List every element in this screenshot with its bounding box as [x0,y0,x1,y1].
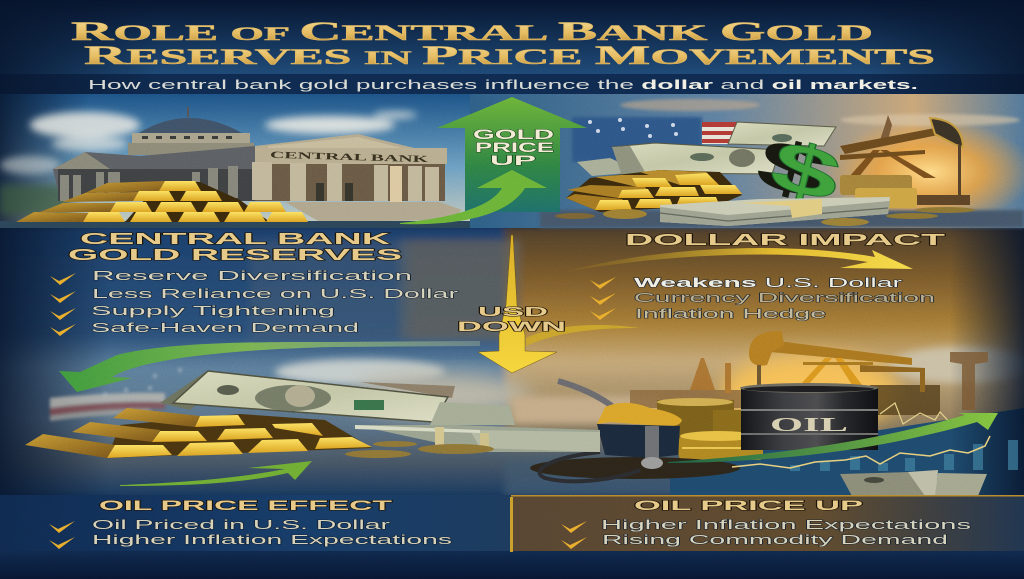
label: USD down [457,304,566,334]
list [49,518,452,549]
label: gold price up: UP [490,152,536,168]
title: R OLE OF C ENTRAL B ANK G OLD [71,17,873,46]
flag [572,117,742,162]
oil barrel [740,383,878,450]
list: Higher Inflation Expectations [92,533,452,547]
dollar sign icon: $ [749,123,834,215]
building: central bank: CENTRAL BANK [270,151,429,165]
oil barrel: OIL [770,414,848,436]
list: Weakens U.S. Dollar [634,276,902,290]
bills: lower right [840,470,987,496]
chart: rising prices [732,403,1018,471]
heading: CENTRAL BANK [80,231,392,248]
cash stack: top [660,197,890,226]
label: USD down: DOWN [457,318,566,334]
bills: lower left [160,371,600,452]
arrow: USD down [457,235,640,373]
gold bars: left [16,181,308,222]
heading: OIL PRICE EFFECT [99,498,394,513]
ground [0,221,480,228]
list: Inflation Hedge [635,307,826,321]
fuel nozzle [530,381,740,481]
list: Safe-Haven Demand [91,321,359,335]
arrow: dollar impact curve [565,248,913,272]
heading: OIL PRICE UP [634,498,863,513]
subtitle: How central bank gold purchases influence the dollar and oil markets. [88,78,918,92]
list: Higher Inflation Expectations [601,518,971,532]
refinery background [630,352,988,415]
heading [68,231,402,264]
heading: DOLLAR IMPACT [625,232,946,249]
bills: top [577,122,836,176]
heading: GOLD RESERVES [68,247,402,264]
label: gold price up: GOLD [473,126,554,142]
arrow: gold price up [400,97,587,224]
list: Supply Tightening [91,304,335,318]
flag: lower left [50,368,182,421]
arrow: rising oil [668,413,998,463]
list: Currency Diversification [634,291,935,305]
panel: dollar impact [590,232,946,321]
panel: header [0,0,1024,94]
list [561,518,971,549]
coin stacks [657,398,764,460]
panel: oil price effect [0,495,511,551]
arrow: small green [120,461,312,486]
list: Reserve Diversification [92,269,412,283]
divider: bottom centre [510,497,513,552]
dollar sign icon: $ [763,125,848,217]
panel: central bank gold reserves [50,231,458,336]
label: USD down: USD [478,304,548,319]
coins: lower left [345,441,494,458]
gold bars: right [566,170,742,212]
coins: top [555,175,975,226]
arrow: gold to dollar [59,341,480,392]
panel: central bank scene [0,94,480,228]
panel: dollar and oil scene [470,94,1024,228]
title [71,17,935,70]
list [50,269,458,336]
pumpjack: top [840,115,970,205]
clouds [0,111,417,174]
panel: reserves and dollar impact backdrop [0,226,1024,498]
list: Less Reliance on U.S. Dollar [92,287,458,301]
label: gold price up [473,126,554,168]
list [590,276,935,321]
title: R ESERVES IN P RICE M OVEMENTS [84,41,935,70]
footer band [0,551,1024,579]
building: central bank [53,107,462,222]
list: Oil Priced in U.S. Dollar [92,518,390,532]
pumpjack: lower right [749,331,925,392]
gold bars: lower left [25,408,372,458]
panel: oil price up [511,495,1024,551]
label: gold price up: PRICE [475,139,554,155]
list: Rising Commodity Demand [602,533,948,547]
